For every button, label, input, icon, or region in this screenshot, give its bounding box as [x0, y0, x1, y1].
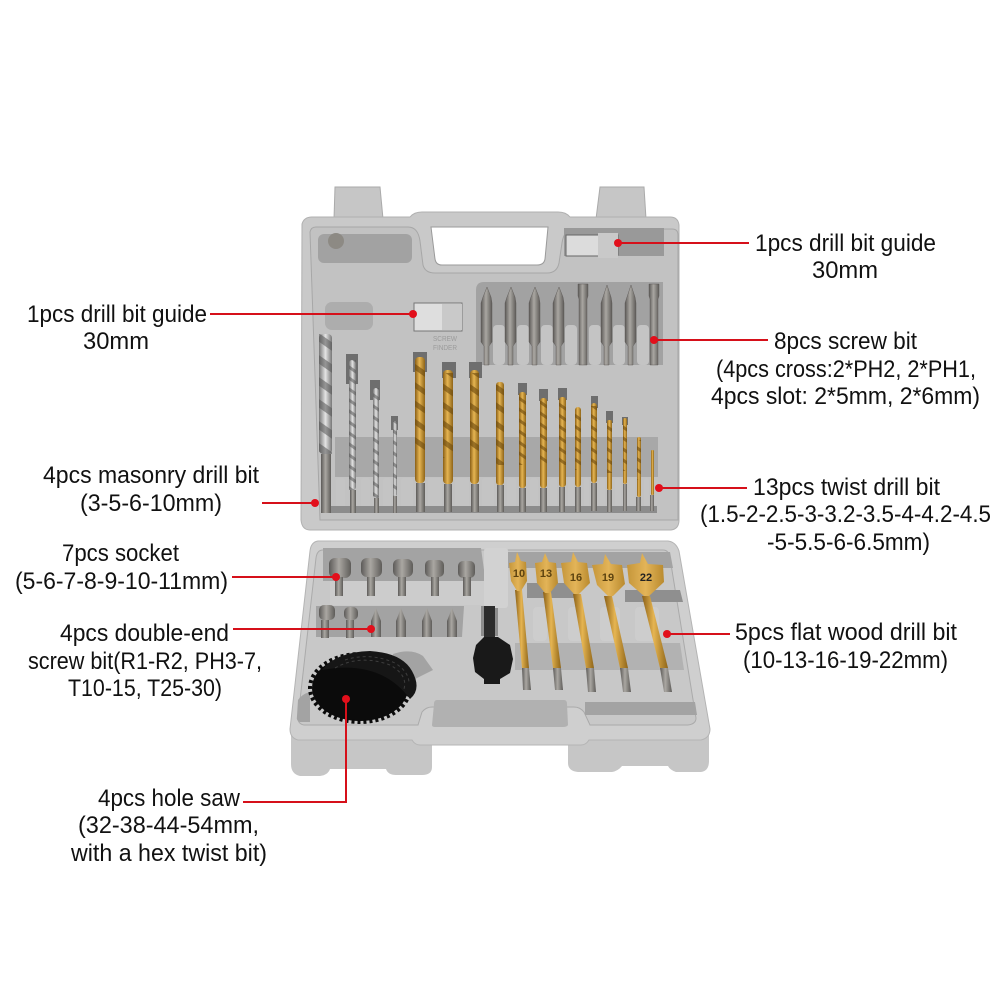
drill bit guide right: [566, 233, 618, 258]
hex twist bit: [473, 606, 513, 684]
feet: [291, 735, 709, 776]
twist drill bits: [415, 357, 654, 512]
label: drill bit guide left: [27, 301, 207, 355]
flat wood drill bits: 22: [640, 572, 652, 584]
wells: [297, 548, 697, 727]
case base: [290, 541, 710, 776]
label: masonry drill bit: [43, 462, 259, 517]
label: double-end screw bit: 4pcs double-end: [60, 620, 229, 647]
label: masonry drill bit: 4pcs masonry drill bit: [43, 462, 259, 489]
handle opening: [431, 227, 548, 265]
label: screw finder: SCREW: [433, 336, 457, 343]
hinge tabs: [334, 187, 646, 219]
label: flat wood drill bit: 5pcs flat wood drill bit: [735, 619, 957, 646]
light tabs between bit slots: [336, 325, 649, 512]
drill bit guide left: [414, 303, 462, 331]
label: screw bit: [711, 328, 980, 410]
label: socket: (5-6-7-8-9-10-11mm): [15, 568, 228, 595]
slot shadows: [321, 352, 657, 513]
flat wood drill bits: 10: [513, 568, 525, 580]
screw bits: [481, 284, 659, 365]
label: screw finder: FINDER: [433, 345, 457, 352]
light ribs: [533, 607, 659, 641]
label: double-end screw bit: T10-15, T25-30): [68, 675, 222, 702]
label: drill bit guide left: 1pcs drill bit guide: [27, 301, 207, 328]
flat wood drill bits: 19: [602, 572, 614, 584]
sockets: [319, 558, 475, 638]
label: flat wood drill bit: (10-13-16-19-22mm): [743, 647, 948, 674]
label: twist drill bit: 13pcs twist drill bit: [753, 474, 940, 501]
label: drill bit guide right: 1pcs drill bit guide: [755, 230, 936, 257]
label: screw finder: [433, 336, 457, 352]
label: double-end screw bit: [28, 620, 262, 702]
label: screw bit: (4pcs cross:2*PH2, 2*PH1,: [716, 356, 976, 383]
label: screw bit: 8pcs screw bit: [774, 328, 917, 355]
flat wood drill bits: 13: [540, 568, 552, 580]
label: twist drill bit: -5-5.5-6-6.5mm): [767, 529, 930, 556]
label: hole saw: 4pcs hole saw: [98, 785, 241, 812]
flat wood drill bits: [509, 552, 672, 692]
label: socket: 7pcs socket: [62, 540, 179, 567]
label: flat wood drill bit: [735, 619, 957, 674]
case lid: [301, 187, 679, 530]
label: hole saw: with a hex twist bit): [70, 840, 267, 867]
label: socket: [15, 540, 228, 595]
label: twist drill bit: [700, 474, 991, 556]
callout lines and dots: [210, 239, 768, 802]
label: double-end screw bit: screw bit(R1-R2, PH3-7,: [28, 648, 262, 675]
label: drill bit guide right: 30mm: [812, 257, 878, 284]
label: masonry drill bit: (3-5-6-10mm): [80, 490, 222, 517]
label: hole saw: (32-38-44-54mm,: [78, 812, 259, 839]
flat wood drill bits: 16: [570, 572, 582, 584]
label: screw bit: 4pcs slot: 2*5mm, 2*6mm): [711, 383, 980, 410]
label: drill bit guide left: 30mm: [83, 328, 149, 355]
label: drill bit guide right: [755, 230, 936, 284]
wells of lid: [318, 228, 664, 477]
hole saw set: [310, 651, 417, 722]
label: hole saw: [70, 785, 267, 867]
double-end screw bits: [371, 608, 457, 637]
masonry drill bits: [319, 334, 397, 513]
